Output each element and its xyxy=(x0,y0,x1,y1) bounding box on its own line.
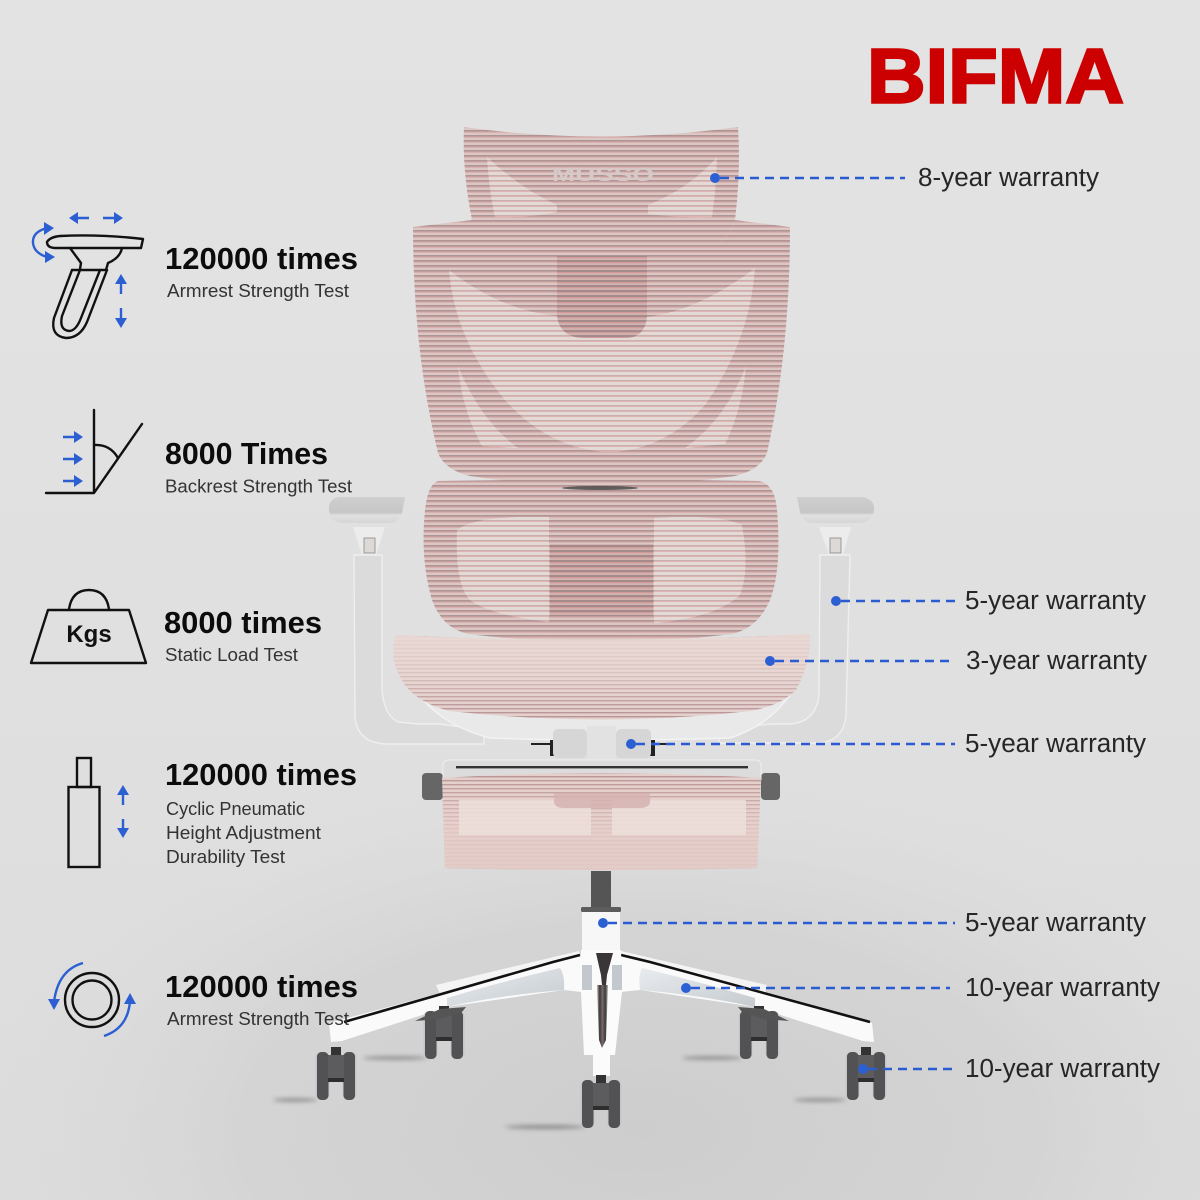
label: backrest test: Backrest Strength Test xyxy=(165,476,352,496)
left armpad xyxy=(329,497,405,523)
seat cushion xyxy=(393,634,809,720)
heading: static load count: 8000 times xyxy=(164,606,322,640)
heading: armrest count: 120000 times xyxy=(165,242,358,276)
callout: mechanism warranty: 5-year warranty xyxy=(965,730,1146,758)
office chair xyxy=(273,127,886,1129)
label: static load test: Static Load Test xyxy=(165,644,298,665)
front leg xyxy=(581,950,622,1076)
footrest mesh xyxy=(442,773,761,870)
left leg xyxy=(329,955,581,1042)
callout: seat warranty xyxy=(765,647,1147,675)
icon: armrest xyxy=(33,212,143,338)
seat shell xyxy=(415,690,792,740)
left inner plate xyxy=(447,968,564,1007)
callout: headrest warranty: 8-year warranty xyxy=(918,164,1099,192)
callout: base warranty xyxy=(681,974,1160,1002)
callout: gas lift warranty xyxy=(598,909,1146,937)
footrest handles xyxy=(422,773,780,800)
right leg xyxy=(621,955,874,1042)
heading: caster count: 120000 times xyxy=(165,970,358,1004)
callout: caster warranty: 10-year warranty xyxy=(965,1055,1160,1083)
test: static load xyxy=(31,590,322,665)
floor shadows xyxy=(273,1056,846,1129)
callout: mechanism warranty xyxy=(626,730,1146,758)
casters xyxy=(316,1006,886,1128)
heading: pneumatic count: 120000 times xyxy=(165,758,357,792)
headrest xyxy=(464,127,739,243)
callout: seat warranty: 3-year warranty xyxy=(966,647,1147,675)
callout: armrest warranty xyxy=(831,587,1146,615)
test: cyclic pneumatic xyxy=(68,758,357,867)
gas lift column xyxy=(581,871,621,950)
back caster covers xyxy=(415,1007,466,1021)
icon: weight: Kgs xyxy=(66,621,112,648)
seat mechanism xyxy=(531,726,673,762)
test: backrest strength xyxy=(46,410,352,496)
callout: headrest warranty xyxy=(710,164,1099,192)
heading: backrest count: 8000 Times xyxy=(165,437,328,471)
top plates xyxy=(436,951,581,994)
label: pneumatic test: Cyclic Pneumatic xyxy=(166,798,305,819)
callout: gas lift warranty: 5-year warranty xyxy=(965,909,1146,937)
callout: base warranty: 10-year warranty xyxy=(965,974,1160,1002)
icon: reclining backrest xyxy=(46,410,142,493)
test: armrest strength xyxy=(33,212,358,338)
label: pneumatic test: Durability Test xyxy=(166,846,285,867)
label: caster test: Armrest Strength Test xyxy=(167,1008,349,1029)
label: pneumatic test: Height Adjustment xyxy=(166,822,321,843)
right inner plate xyxy=(639,968,755,1007)
lumbar back panel xyxy=(424,480,778,642)
right arm connector xyxy=(819,527,851,555)
BIFMA heading: BIFMA xyxy=(867,34,1124,120)
icon: rotating wheel xyxy=(48,963,136,1036)
left arm connector xyxy=(353,527,385,555)
arm posts xyxy=(329,497,874,744)
callout: armrest warranty: 5-year warranty xyxy=(965,587,1146,615)
headrest logo: MUSSO xyxy=(552,165,654,186)
test: caster rotation xyxy=(48,963,358,1036)
icon: weight xyxy=(31,590,146,663)
footrest frame xyxy=(443,760,761,780)
base arms xyxy=(329,950,874,1076)
label: armrest test: Armrest Strength Test xyxy=(167,280,349,301)
backrest xyxy=(413,220,790,486)
label: pneumatic test xyxy=(166,798,321,867)
icon: gas cylinder xyxy=(68,758,129,867)
right armpad xyxy=(797,497,874,523)
callout: caster warranty xyxy=(858,1055,1160,1083)
